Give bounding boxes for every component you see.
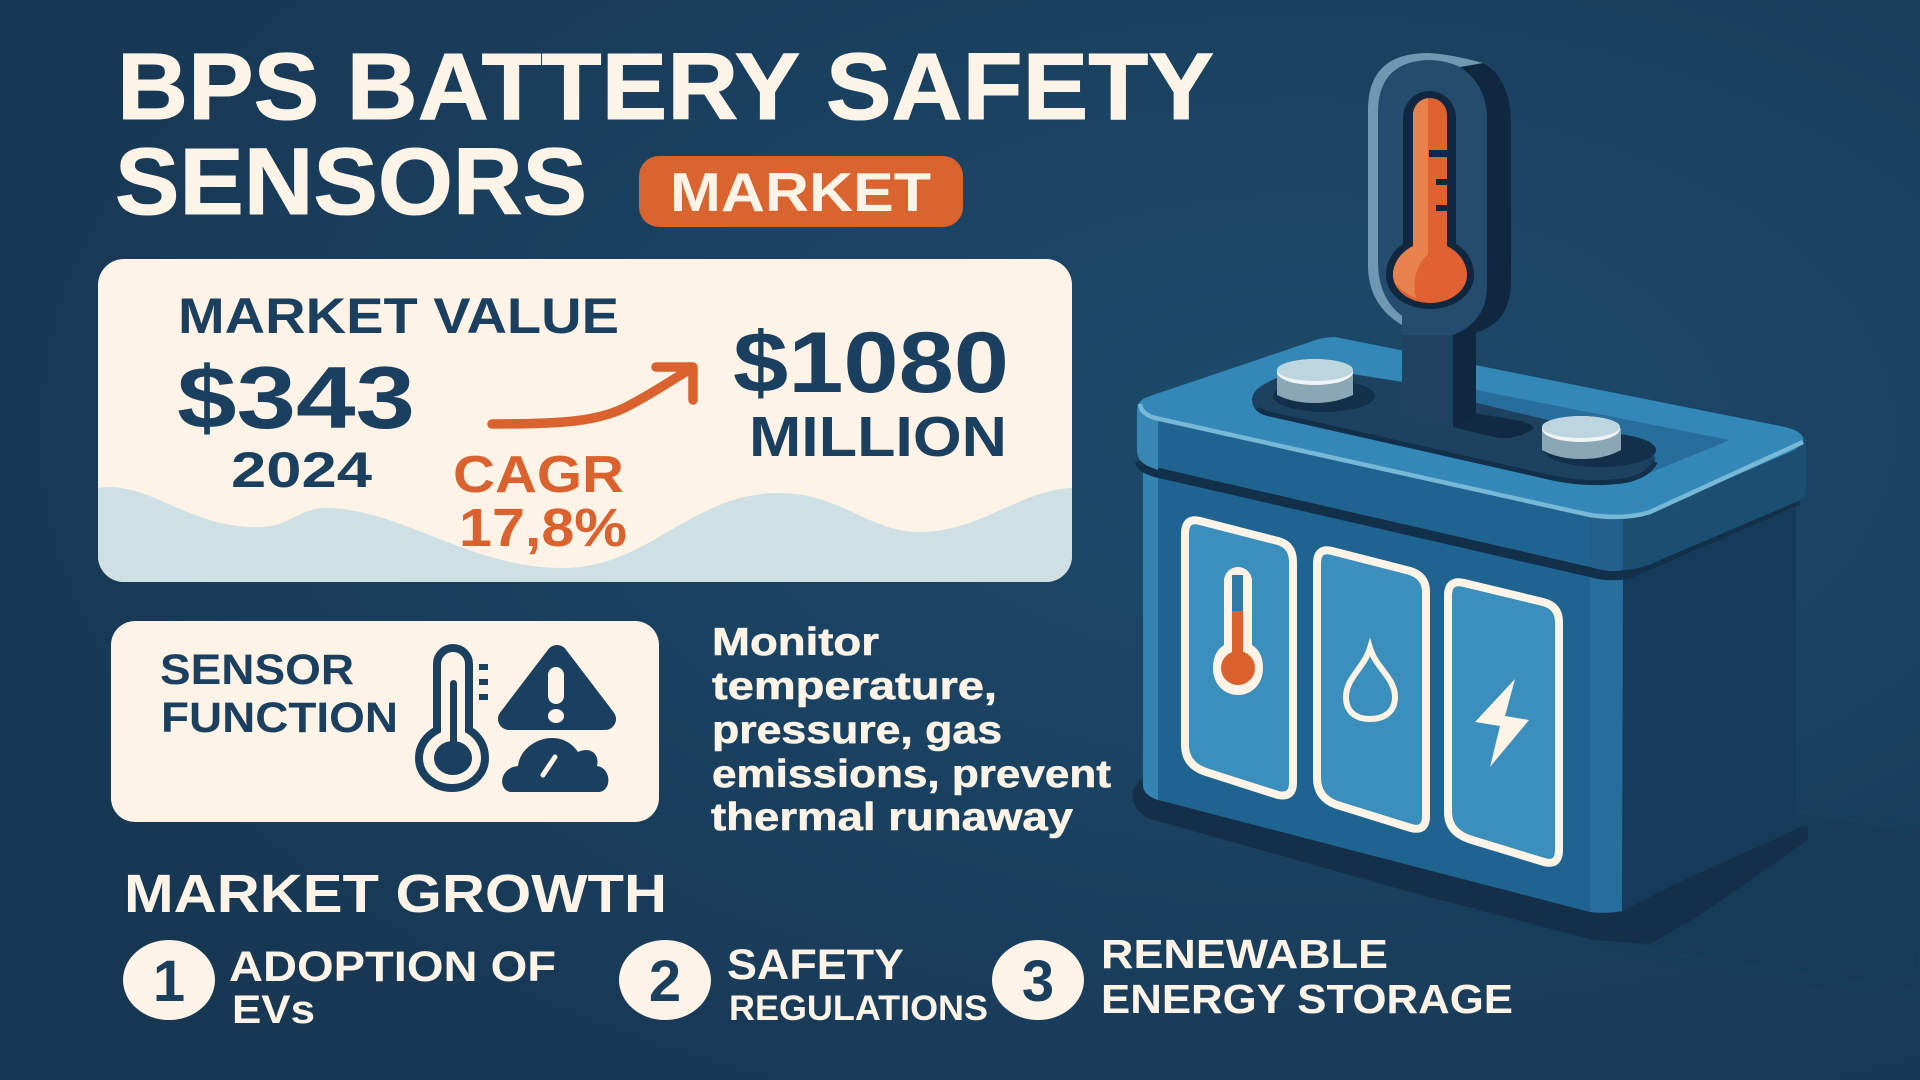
contact shadow [1132,780,1809,944]
right terminal [1542,416,1656,467]
battery body left strip [1143,470,1158,800]
heading: market growth: MARKET GROWTH [124,864,667,924]
badge: market [639,156,963,227]
growth driver 2: 2 [649,949,681,1014]
icon: panel thermometer [1213,567,1263,695]
illustration: battery with sensor [1132,53,1920,990]
sensor function label [160,646,398,742]
year: 2024 [231,442,372,498]
panel: market value [98,259,1072,582]
text: sensor function description [711,621,1111,839]
soft ground shadow [1421,813,1920,990]
market value label: MARKET VALUE [178,288,619,344]
sensor function label: SENSOR [160,646,354,694]
title: SENSORS [115,129,587,235]
lid left strip [1137,410,1158,470]
lid right side [1623,436,1806,570]
panel: sensor function [111,621,659,822]
growth driver 1: 1 [153,949,185,1014]
lid top [1137,337,1803,518]
sensor function label: FUNCTION [161,694,398,742]
growth driver 1: ADOPTION OF [229,943,556,991]
wave decoration [98,487,1072,582]
battery body right side [1622,500,1796,911]
growth driver 2: SAFETY [727,941,904,989]
growth driver 3: 3 [1022,949,1054,1014]
badge: market: MARKET [670,161,931,223]
text: sensor function description: temperature, [712,665,997,708]
battery corner band [1590,568,1623,913]
text: sensor function description: thermal runaway [711,796,1073,839]
growth driver 1: EVs [232,988,315,1032]
cagr [453,446,627,558]
growth driver 3: RENEWABLE [1101,931,1388,977]
terminal base plate [1252,372,1655,485]
battery panel: pressure [1317,550,1426,829]
growth arrow [492,367,693,424]
left terminal [1273,359,1375,412]
cagr: CAGR [453,446,624,504]
million: MILLION [749,405,1007,469]
growth driver 1 [123,940,556,1032]
growth driver 3 [992,931,1513,1022]
icon: water drop [1346,648,1395,719]
title: BPS BATTERY SAFETY [117,34,1214,140]
icon: lightning bolt [1475,679,1529,767]
battery panel: temperature [1185,520,1293,796]
lid recess [1400,375,1730,485]
cagr: 17,8% [459,498,627,558]
text: sensor function description: emissions, prevent [712,753,1111,796]
battery body front [1143,470,1623,913]
growth driver 3: ENERGY STORAGE [1101,976,1513,1022]
sensor stem [1402,320,1476,427]
value 2024: $343 [177,348,415,447]
icon: warning triangle [509,656,605,723]
stem shadow on plate [1453,413,1533,438]
lid corner band [1590,512,1623,571]
text: sensor function description: pressure, gas [712,709,1002,752]
sensor head [1368,53,1511,335]
title [115,34,1214,235]
plate lower rim [1258,408,1655,483]
value forecast: $1080 [733,315,1009,411]
text: sensor function description: Monitor [712,621,879,664]
sensor thermometer [1386,91,1474,309]
battery panel: energy [1448,582,1559,863]
lid dark seam [1140,461,1798,575]
icon: gas cloud [502,738,608,792]
growth driver 2: REGULATIONS [729,989,988,1028]
lid highlight edge [1140,404,1803,517]
icon: thermometer [419,648,488,788]
lid front [1137,410,1623,571]
growth driver 2 [619,940,988,1028]
